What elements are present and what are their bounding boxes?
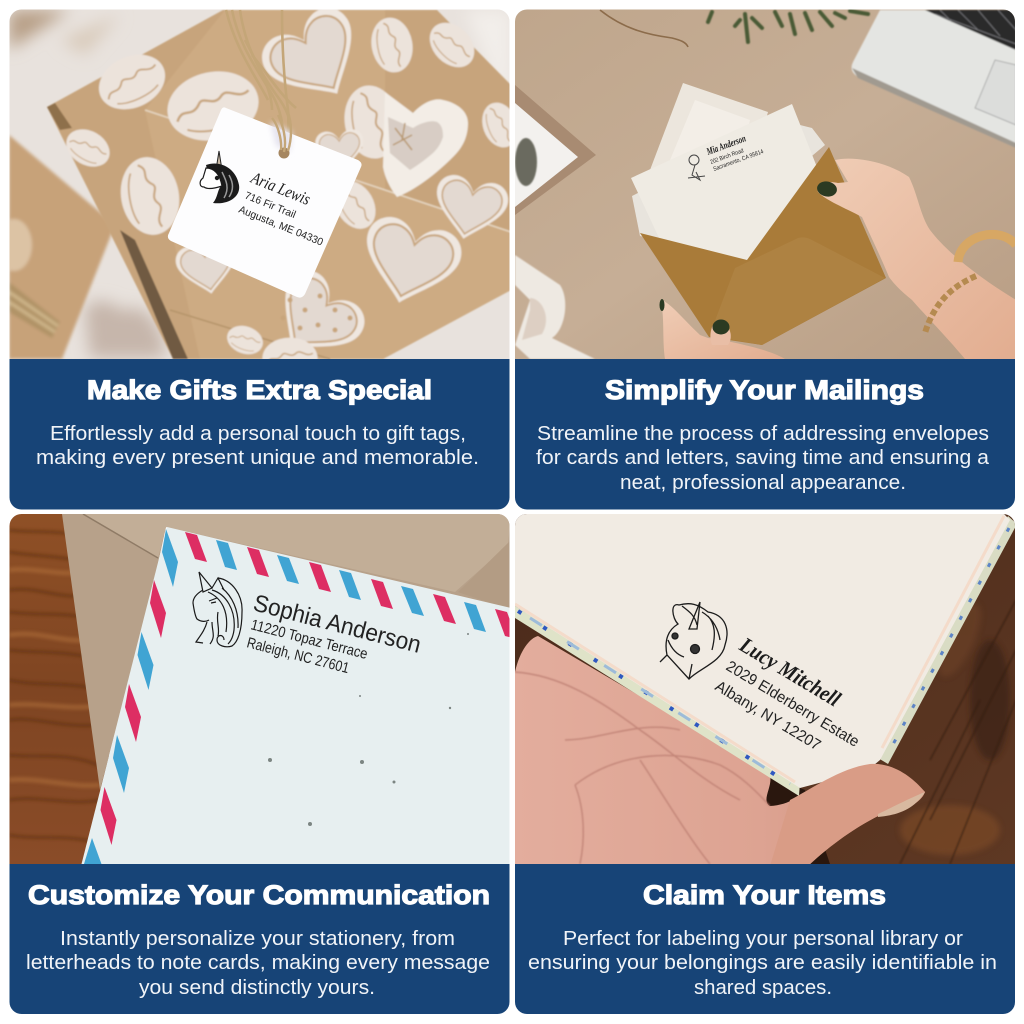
description: ensuring your belongings are easily identifiable in bbox=[528, 952, 997, 974]
page pink edge bbox=[515, 516, 1004, 782]
panel: simplify your mailings bbox=[515, 9, 1017, 510]
mini stamp city: Sacramento, CA 95814 bbox=[713, 149, 765, 173]
gift box kraft paper bbox=[46, 10, 510, 359]
envelope inner flap bbox=[715, 237, 885, 345]
description: Perfect for labeling your personal library or bbox=[563, 928, 963, 950]
back paper bbox=[650, 83, 768, 170]
stamp: name: Aria Lewis bbox=[248, 168, 313, 209]
description: Effortlessly add a personal touch to gift tags, bbox=[50, 423, 466, 445]
stamp: city and zip: Augusta, ME 04330 bbox=[237, 204, 325, 249]
photo: wrapped gift with tag bbox=[10, 10, 510, 359]
heading: Make Gifts Extra Special bbox=[87, 375, 432, 405]
stamp: unicorn outline bbox=[193, 572, 242, 647]
airmail stripes top bbox=[185, 532, 517, 639]
envelope liner bbox=[632, 125, 825, 238]
description bbox=[536, 423, 990, 494]
description: shared spaces. bbox=[694, 977, 832, 999]
stamp: street address: 11220 Topaz Terrace bbox=[249, 616, 369, 663]
book edge right bbox=[878, 516, 1017, 764]
wood table bbox=[515, 514, 1017, 866]
panel: customize your communication bbox=[9, 514, 517, 1015]
palm creases bbox=[515, 672, 770, 864]
thumb over page bbox=[770, 764, 925, 866]
right hand bbox=[817, 159, 1016, 359]
description: making every present unique and memorable. bbox=[36, 447, 479, 469]
description: neat, professional appearance. bbox=[620, 472, 906, 494]
stamp: name: Sophia Anderson bbox=[250, 590, 424, 659]
description: Instantly personalize your stationery, from bbox=[60, 928, 455, 950]
heading: Customize Your Communication bbox=[28, 880, 490, 910]
twine strand bbox=[600, 10, 688, 47]
description: letterheads to note cards, making every message bbox=[26, 952, 490, 974]
caption box bbox=[9, 359, 511, 510]
twine behind tag bbox=[225, 10, 296, 130]
envelope front bbox=[640, 147, 886, 345]
stamp: name: Lucy Mitchell bbox=[735, 631, 846, 712]
photo: airmail note card bbox=[9, 514, 517, 896]
left blurred package bbox=[10, 134, 112, 359]
white paper cutout heart bbox=[383, 92, 468, 197]
caption box bbox=[515, 864, 1017, 1015]
stamp: city and zip: Raleigh, NC 27601 bbox=[245, 634, 351, 677]
description: you send distinctly yours. bbox=[139, 977, 375, 999]
description bbox=[26, 928, 490, 999]
dark gap bbox=[760, 770, 830, 864]
green nail left bbox=[660, 299, 730, 334]
left hand bbox=[660, 300, 785, 359]
stamp: street address: 2029 Elderberry Estate bbox=[723, 658, 862, 751]
airmail stripes left bbox=[84, 529, 178, 896]
description: Streamline the process of addressing envelopes bbox=[537, 423, 989, 445]
heading: Claim Your Items bbox=[643, 880, 886, 910]
book page bbox=[515, 514, 1010, 788]
gift tag bbox=[168, 107, 362, 298]
note card paper bbox=[81, 527, 511, 866]
photo: hand holding book bbox=[515, 514, 1017, 866]
panel: make gifts extra special bbox=[0, 0, 524, 510]
plant leaves bbox=[708, 11, 868, 42]
book edge bottom bbox=[515, 606, 800, 796]
left card bbox=[515, 85, 596, 215]
laptop bbox=[852, 10, 1016, 148]
description bbox=[528, 928, 997, 999]
mini stamp name: Mia Anderson bbox=[705, 133, 748, 158]
stamp: street address: 716 Fir Trail bbox=[243, 190, 297, 221]
caption box bbox=[515, 359, 1017, 510]
thumbnail bbox=[878, 792, 925, 817]
ribbon bbox=[515, 255, 595, 359]
green nail right bbox=[817, 181, 837, 197]
twine through hole bbox=[272, 112, 291, 152]
stamp: city and zip: Albany, NY 12207 bbox=[712, 678, 824, 754]
photo: envelope on burlap bbox=[515, 9, 1017, 361]
mini stamp address: 202 Birch Road bbox=[710, 148, 745, 166]
heading: Simplify Your Mailings bbox=[605, 375, 924, 405]
description bbox=[36, 423, 479, 469]
gold frame bbox=[958, 234, 1016, 262]
stamp: unicorn face bbox=[660, 602, 727, 679]
hand bbox=[515, 636, 925, 866]
mini stamp unicorn bbox=[688, 155, 705, 180]
panel: claim your items bbox=[515, 514, 1017, 1015]
wood table bbox=[9, 514, 109, 866]
wrapping paper hearts bbox=[60, 0, 524, 378]
kraft envelope bbox=[62, 514, 511, 790]
note card bbox=[631, 104, 816, 260]
stamp: unicorn head bbox=[200, 151, 239, 203]
bracelet bbox=[925, 276, 976, 333]
caption box bbox=[9, 864, 511, 1015]
description: for cards and letters, saving time and ensuring a bbox=[536, 447, 990, 469]
